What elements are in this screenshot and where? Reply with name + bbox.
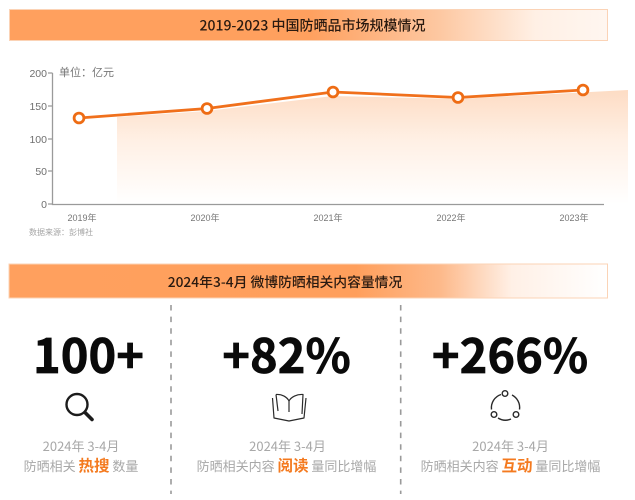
unit label: 单位：亿元 bbox=[59, 64, 114, 80]
dashed dividers bbox=[171, 305, 401, 494]
icon: magnifier bbox=[66, 394, 92, 420]
caption: 2024年 3-4月 bbox=[249, 436, 326, 455]
y axis labels: 0 bbox=[41, 199, 47, 211]
data points bbox=[74, 85, 588, 123]
stat: hot search: 防晒相关 热搜 数量 bbox=[24, 454, 138, 476]
icon: open book bbox=[272, 394, 306, 421]
data line bbox=[79, 90, 583, 118]
y axis labels: 100 bbox=[29, 134, 47, 146]
area under line bbox=[117, 90, 628, 204]
x axis labels: 2023年 bbox=[559, 212, 589, 223]
x axis labels bbox=[67, 212, 589, 223]
stat: hot search bbox=[24, 318, 144, 476]
stat: reading: 防晒相关内容 阅读 量同比增幅 bbox=[197, 454, 376, 476]
header: Weibo content: 2024年3-4月 微博防晒相关内容量情况 bbox=[168, 271, 402, 291]
number: +82% bbox=[222, 318, 351, 387]
stat: interaction: 防晒相关内容 互动 量同比增幅 bbox=[421, 454, 600, 476]
y axis bbox=[48, 73, 604, 204]
header: market size: 2019-2023 中国防晒品市场规模情况 bbox=[200, 16, 426, 36]
y axis labels: 50 bbox=[35, 166, 47, 178]
x axis labels: 2021年 bbox=[313, 212, 343, 223]
icon: three connected nodes bbox=[491, 391, 520, 420]
header: Weibo content bbox=[9, 264, 608, 298]
y axis labels: 200 bbox=[29, 68, 47, 80]
y axis labels: 150 bbox=[29, 101, 47, 113]
stat: interaction bbox=[421, 318, 600, 476]
x axis labels: 2022年 bbox=[436, 212, 466, 223]
number: +266% bbox=[432, 318, 588, 387]
header: market size bbox=[10, 10, 608, 40]
data source: 数据来源：彭博社 bbox=[29, 227, 93, 238]
y axis labels bbox=[29, 68, 47, 211]
caption: 2024年 3-4月 bbox=[472, 436, 549, 455]
stat: reading bbox=[197, 318, 376, 476]
x axis labels: 2020年 bbox=[190, 212, 220, 223]
line chart: market size bbox=[29, 64, 628, 223]
x axis labels: 2019年 bbox=[67, 212, 97, 223]
caption: 2024年 3-4月 bbox=[43, 436, 119, 455]
number: 100+ bbox=[33, 318, 144, 387]
